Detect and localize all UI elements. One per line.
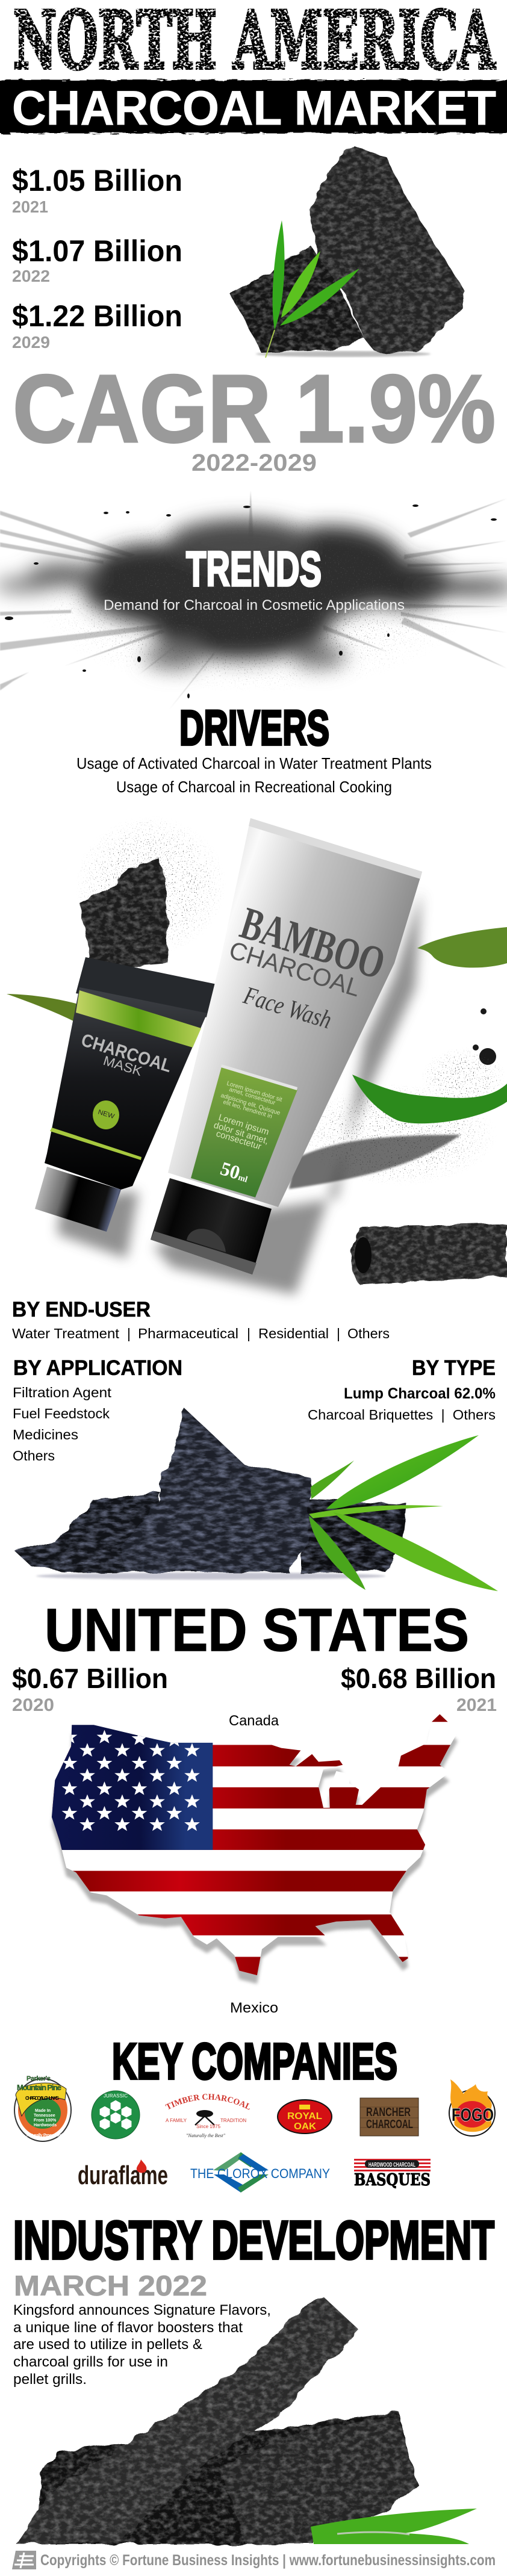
image: charcoal logs with leaves <box>16 2297 477 2544</box>
label text: elit leo, hendrerit in <box>222 1099 273 1120</box>
value: US 2020 <box>12 1663 168 1715</box>
mask tube: CHARCOAL <box>79 1030 174 1076</box>
text: drivers list: Usage of Activated Charcoal in Water Treatment Plants <box>76 754 432 772</box>
logo: Timber Charcoal Co.: A FAMILY <box>166 2118 187 2123</box>
heading: drivers: DRIVERS <box>179 701 329 756</box>
logo: Parker's Mountain Pine: Parker's <box>26 2075 51 2082</box>
type items: Charcoal Briquettes | Others <box>308 1407 496 1423</box>
logo: Jurassic Activated Carbon: JURASSIC <box>104 2093 128 2099</box>
value 2022 <box>12 234 182 285</box>
logo: Basques <box>354 2159 431 2190</box>
logo: Parker's Mountain Pine: Mountain Pine <box>17 2083 61 2092</box>
splatter right <box>289 1008 506 1189</box>
value 2021: 2021 <box>12 197 48 216</box>
logo: Timber Charcoal Co.: TIMBER CHARCOAL Co. <box>165 2094 250 2110</box>
heading: trends: TRENDS <box>186 542 322 597</box>
logo: Fogo <box>449 2079 495 2136</box>
logo: Rancher Charcoal <box>360 2098 418 2136</box>
CAGR period: 2022-2029 <box>191 450 317 476</box>
text: industry development body: are used to utilize in pellets & <box>13 2336 202 2353</box>
text: drivers list <box>76 754 432 796</box>
charcoal debris above mask tube <box>75 816 226 969</box>
end-user items: Water Treatment <box>12 1326 120 1341</box>
footer <box>12 2551 496 2569</box>
text: March 2022 date: MARCH 2022 <box>14 2270 207 2301</box>
logo: Timber Charcoal Co.: "Naturally the Best" <box>186 2133 226 2138</box>
value 2029 <box>12 299 182 352</box>
label text: adipiscing elit. Quisque <box>220 1092 281 1117</box>
face wash tube: 50ml <box>218 1157 252 1187</box>
logo: Royal Oak <box>278 2100 332 2134</box>
logo: Duraflame <box>78 2159 168 2190</box>
text: drivers list: Usage of Charcoal in Recreational Cooking <box>116 778 392 796</box>
value 2022: $1.07 Billion <box>12 234 182 268</box>
value 2021: $1.05 Billion <box>12 164 182 197</box>
panel: by type <box>308 1356 496 1423</box>
end-user items: Pharmaceutical <box>138 1326 238 1341</box>
logo: Parker's Mountain Pine: CHARCOAL CHUNKS <box>25 2096 60 2101</box>
face wash tube: BAMBOO <box>235 898 391 989</box>
icon: Fortune Business Insights logo <box>12 2551 36 2569</box>
end-user items: Residential <box>258 1326 329 1341</box>
logo: Parker's Mountain Pine: From 100% <box>34 2118 57 2123</box>
value: US 2020: 2020 <box>12 1695 54 1715</box>
text: industry development body: a unique line of flavor boosters that <box>13 2320 243 2336</box>
logo: Royal Oak: OAK <box>294 2121 316 2132</box>
end-user items: Others <box>347 1326 390 1341</box>
logo: Parker's Mountain Pine: Made In <box>35 2109 51 2113</box>
panel: by end-user: BY END-USER <box>12 1298 151 1321</box>
end-user items: | <box>247 1326 250 1341</box>
charcoal stick <box>350 1223 507 1286</box>
image: charcoal mound with bamboo <box>14 1408 498 1591</box>
face wash tube: CHARCOAL <box>226 936 364 1002</box>
mask tube: MASK <box>102 1053 144 1079</box>
end-user items <box>12 1326 390 1341</box>
image: charcoal cosmetic tubes <box>7 816 507 1294</box>
application items: Fuel Feedstock <box>13 1406 110 1421</box>
logo: Parker's Mountain Pine: Hardwoods <box>34 2123 57 2128</box>
value 2021 <box>12 164 182 216</box>
label text: dolor sit amet, <box>213 1120 270 1146</box>
map: United States flag <box>50 1715 459 1985</box>
value 2029: 2029 <box>12 333 50 352</box>
value 2029: $1.22 Billion <box>12 299 182 333</box>
value: US 2021: $0.68 Billion <box>341 1663 496 1694</box>
logo: Timber Charcoal Co.: TRADITION <box>220 2118 246 2123</box>
label text <box>213 1080 283 1152</box>
panel: by application: BY APPLICATION <box>13 1356 182 1380</box>
logo: Fogo: FOGO <box>452 2105 494 2125</box>
type highlight: Lump Charcoal 62.0% <box>344 1385 496 1402</box>
mask tube: NEW <box>97 1108 116 1120</box>
logo: Parker's Mountain Pine <box>14 2075 71 2141</box>
mask tube <box>35 957 217 1232</box>
application items <box>13 1385 112 1463</box>
logo: Rancher Charcoal: RANCHER <box>366 2106 411 2119</box>
label text: Lorem ipsum dolor sit <box>226 1080 283 1103</box>
value: US 2021: 2021 <box>456 1695 497 1715</box>
value: US 2020: $0.67 Billion <box>12 1663 168 1694</box>
text: industry development body: charcoal grills for use in <box>13 2354 168 2370</box>
logo: Duraflame: duraflame <box>78 2161 168 2190</box>
logo: Jurassic Activated Carbon <box>92 2091 140 2139</box>
logo: Timber Charcoal Co.: Since 1975 <box>196 2124 221 2129</box>
title banner: Charcoal Market: CHARCOAL MARKET <box>12 81 496 135</box>
face wash tube <box>151 818 422 1274</box>
heading: united states: UNITED STATES <box>45 1597 469 1664</box>
leaf left <box>7 994 78 1022</box>
text: trends item: Demand for Charcoal in Cosmetic Applications <box>104 597 405 613</box>
logo: Basques: HARDWOOD CHARCOAL <box>369 2162 415 2168</box>
logo: Basques: BASQUES <box>354 2171 431 2190</box>
logo: Timber Charcoal Co. <box>165 2094 250 2138</box>
text: industry development body: pellet grills. <box>13 2371 87 2388</box>
tube shadows <box>57 891 421 1294</box>
application items: Filtration Agent <box>13 1385 112 1400</box>
market values <box>12 164 182 352</box>
image: charcoal chunks with bamboo leaves <box>229 146 465 358</box>
label: Canada: Canada <box>229 1713 279 1729</box>
application items: Medicines <box>13 1427 78 1442</box>
logo: Parker's Mountain Pine: Naturally Processed <box>26 2134 63 2138</box>
text: industry development body: Kingsford announces Signature Flavors, <box>13 2302 271 2318</box>
label text: amet, consectetur <box>228 1086 276 1106</box>
logo: Rancher Charcoal: CHARCOAL <box>366 2118 413 2131</box>
application items: Others <box>13 1448 55 1463</box>
panel: by end-user <box>12 1298 390 1341</box>
leaves right <box>417 927 507 967</box>
text: industry development body <box>13 2302 271 2388</box>
panel: trends smoke burst <box>0 491 507 709</box>
value: US 2021 <box>341 1663 497 1715</box>
label text: Lorem ipsum <box>217 1113 270 1137</box>
panel: by type: BY TYPE <box>412 1356 496 1380</box>
end-user items: | <box>337 1326 340 1341</box>
value 2022: 2022 <box>12 267 50 285</box>
label text: consectetur <box>215 1129 263 1152</box>
logo: The Clorox Company: THE CLOROX COMPANY <box>190 2166 330 2181</box>
label: Mexico: Mexico <box>230 2000 278 2016</box>
logo: Royal Oak: ROYAL <box>287 2111 322 2121</box>
logo: The Clorox Company <box>190 2152 330 2193</box>
face wash tube: Face Wash <box>240 981 335 1034</box>
end-user items: | <box>127 1326 131 1341</box>
panel: by application <box>13 1356 182 1463</box>
logo: Parker's Mountain Pine: Tennessee <box>34 2114 55 2118</box>
